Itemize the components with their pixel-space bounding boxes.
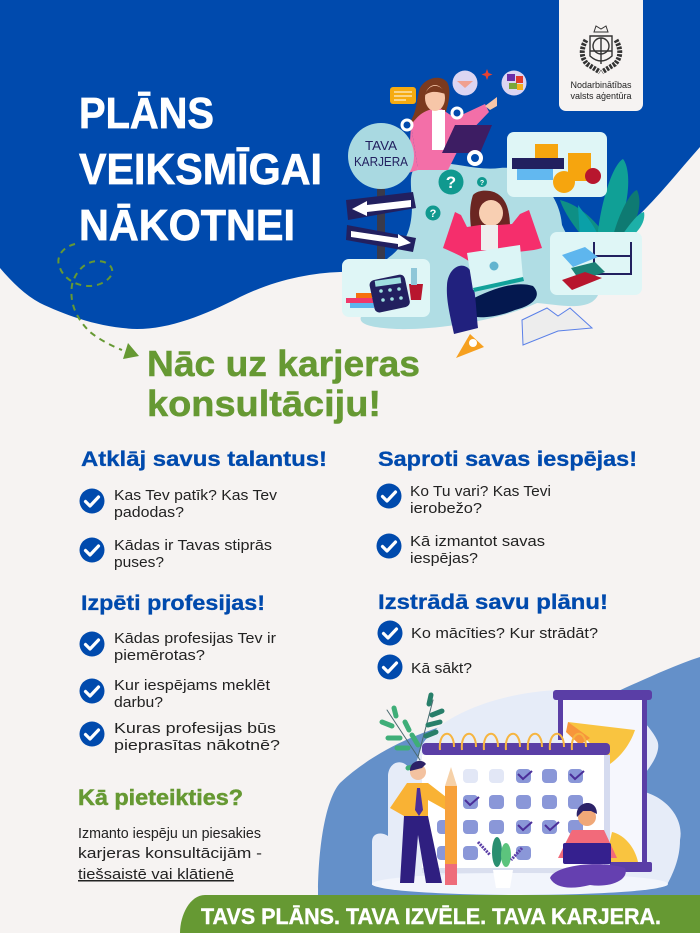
title: VEIKSMĪGAI (79, 145, 322, 194)
plant leaves (560, 159, 644, 245)
potted plant (478, 837, 522, 888)
title: PLĀNS (79, 89, 214, 138)
panel: plan: Izstrādā savu plānu! (378, 591, 608, 614)
panel: talents: puses? (114, 554, 164, 571)
footer bar (180, 895, 700, 933)
speech bubble (390, 87, 416, 104)
logo: coat of arms (582, 26, 620, 72)
signpost: TAVA (365, 138, 397, 153)
logo card: valsts aģentūra (570, 91, 632, 102)
question marks: ? (446, 173, 456, 192)
presenter woman (390, 69, 526, 173)
man with pencil (390, 761, 457, 885)
calendar (422, 734, 610, 873)
panel: opportunities: iespējas? (410, 550, 478, 567)
lower right blue wave (318, 657, 700, 895)
plant (382, 695, 442, 768)
panel: how to apply: karjeras konsultācijām - (78, 845, 262, 862)
heading: call to action: Nāc uz karjeras (147, 343, 420, 384)
question marks: ? (430, 208, 437, 220)
logo card (559, 0, 643, 111)
open book (522, 308, 592, 345)
panel: professions: Kur iespējams meklēt (114, 677, 271, 694)
signpost: KARJERA (354, 154, 408, 169)
panel: plan: Ko mācīties? Kur strādāt? (411, 625, 598, 642)
card: coins (507, 132, 607, 197)
calendar illustration (372, 690, 681, 895)
footer bar: TAVS PLĀNS. TAVA IZVĒLE. TAVA KARJERA. (201, 904, 661, 929)
teal blob (361, 163, 598, 329)
panel: professions: Kuras profesijas būs (114, 720, 276, 737)
panel: professions: darbu? (114, 694, 163, 711)
panel: talents: Kas Tev patīk? Kas Tev (114, 487, 278, 504)
panel: opportunities: ierobežo? (410, 500, 482, 517)
panel: talents: padodas? (114, 504, 184, 521)
panel: plan (378, 591, 608, 680)
question marks (426, 170, 487, 220)
pale background shapes (372, 690, 681, 885)
card: books (550, 232, 642, 295)
panel: opportunities: Kā izmantot savas (410, 533, 545, 550)
panel: talents: Atklāj savus talantus! (81, 448, 327, 471)
puzzle bubble (502, 70, 526, 96)
panel: opportunities: Saproti savas iespējas! (378, 448, 637, 471)
panel: how to apply: Kā pieteikties? (78, 785, 243, 810)
panel: how to apply: Izmanto iespēju un piesakies (78, 825, 261, 842)
panel: professions: pieprasītas nākotnē? (114, 737, 280, 754)
sitting woman (443, 191, 542, 358)
card: calculator (342, 259, 430, 317)
panel: opportunities: Ko Tu vari? Kas Tevi (410, 483, 551, 500)
person with laptop (550, 803, 626, 888)
logo text: Nodarbinātības (570, 80, 632, 91)
panel: talents: Kādas ir Tavas stiprās (114, 537, 272, 554)
panel: professions: piemērotas? (114, 647, 205, 664)
blue header wave (0, 0, 700, 329)
panel: professions: Kādas profesijas Tev ir (114, 630, 276, 647)
title: NĀKOTNEI (79, 201, 295, 250)
signpost (346, 123, 416, 260)
hourglass (553, 690, 652, 872)
dashed arrow (58, 244, 139, 359)
panel: opportunities (376, 448, 637, 567)
career illustration (342, 69, 644, 358)
panel: how to apply: tiešsaistē vai klātienē (78, 866, 234, 883)
title (79, 89, 322, 250)
panel: professions (80, 592, 280, 754)
handshake bubble (452, 70, 478, 96)
heading: call to action (147, 343, 420, 424)
panel: professions: Izpēti profesijas! (81, 592, 265, 615)
question marks: ? (480, 180, 484, 187)
heading: call to action: konsultāciju! (147, 383, 381, 424)
panel: how to apply (78, 785, 262, 883)
panel: plan: Kā sākt? (411, 660, 472, 677)
gears (452, 108, 462, 118)
panel: talents (80, 448, 327, 571)
